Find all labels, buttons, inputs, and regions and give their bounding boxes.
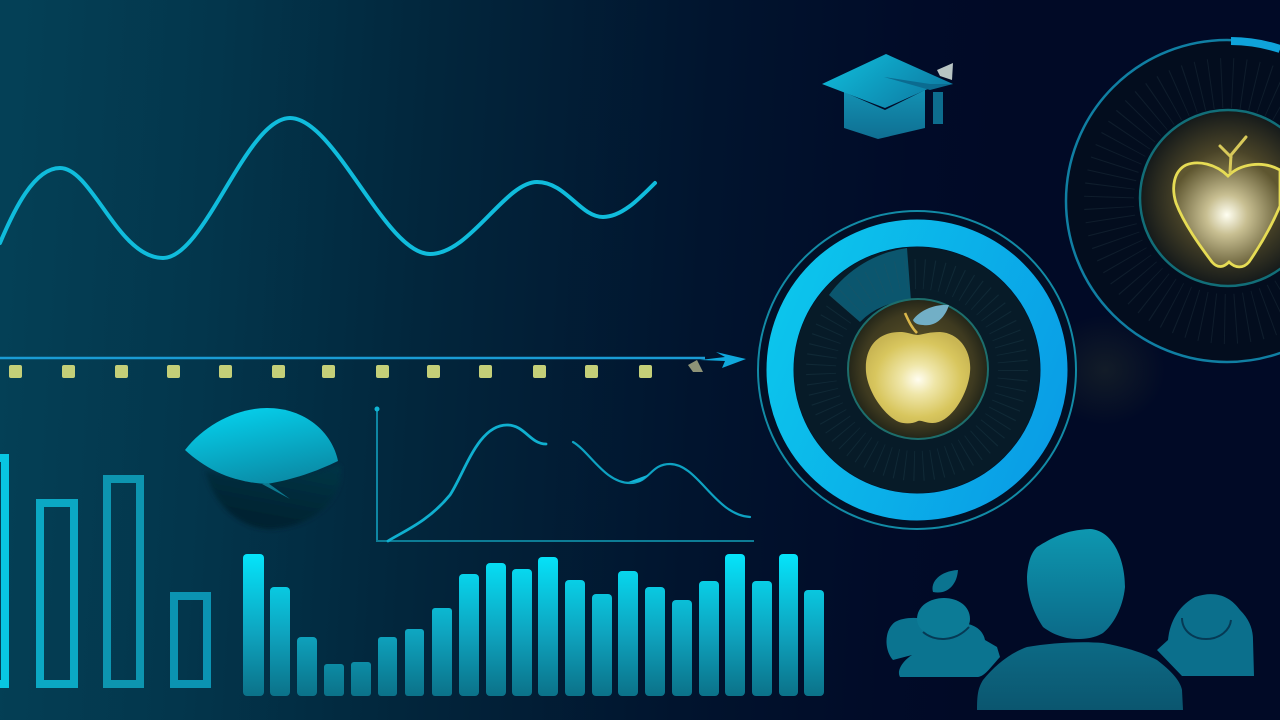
gradient bar chart [243,554,824,696]
timeline arrow with markers [0,352,746,378]
ring gauge: outlined apple [1066,40,1280,362]
line chart: main wave [0,118,655,258]
pie chart [185,408,341,529]
gauge ticks [821,274,1013,466]
person: centre [977,529,1183,710]
person: left [886,570,1000,677]
icon: solid apple [866,305,970,423]
hollow bar chart [0,458,207,684]
line chart: axes and curve [374,406,754,541]
gauge ticks [1109,83,1280,319]
icon: outlined apple [1174,137,1280,267]
person: right [1157,594,1254,676]
timeline markers [9,360,703,378]
soft glow between rings [1045,315,1165,425]
gauge highlighted sector [829,248,911,322]
icon: group of people [886,529,1254,710]
ring gauge: golden apple [758,211,1076,529]
icon: graduation cap [822,54,953,139]
